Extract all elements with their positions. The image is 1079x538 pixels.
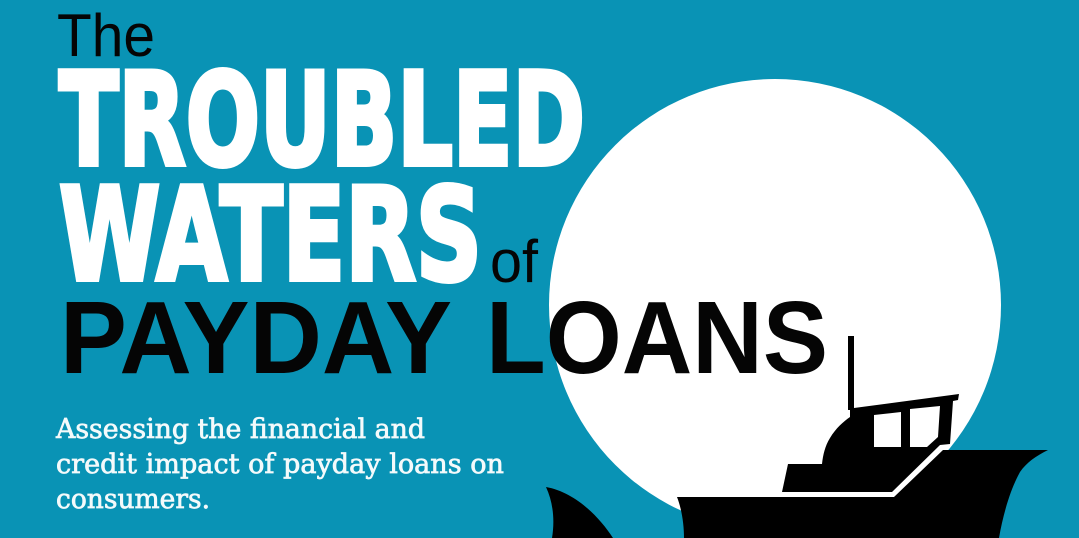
boat cabin: [782, 394, 959, 492]
title: PAYDAY LOANS: PAYDAY: [60, 280, 452, 395]
title: The: The: [57, 2, 155, 69]
boat mast: [848, 336, 854, 410]
subtitle: [55, 414, 504, 515]
subtitle: consumers.: [56, 484, 210, 515]
boat silhouette: [677, 336, 1048, 538]
title: TROUBLED: TROUBLED: [59, 46, 585, 196]
title: WATERS: WATERS: [59, 162, 482, 310]
subtitle: Assessing the financial and: [55, 414, 425, 445]
title: of: of: [490, 228, 538, 295]
subtitle: credit impact of payday loans on: [56, 449, 504, 480]
title: PAYDAY LOANS: LOANS: [486, 280, 828, 395]
title: PAYDAY LOANS: [60, 280, 828, 395]
shark fin: [546, 487, 613, 538]
title: [57, 2, 828, 395]
boat hull: [677, 450, 1048, 538]
moon circle: [549, 79, 1001, 531]
